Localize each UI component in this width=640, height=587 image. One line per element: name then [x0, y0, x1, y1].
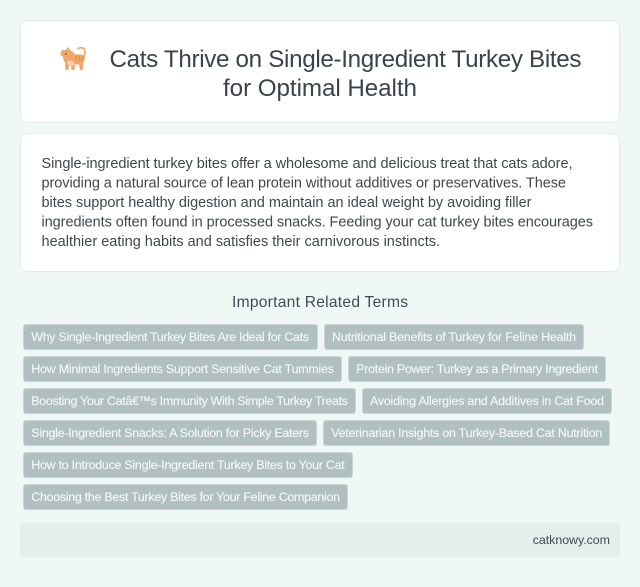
title text: Cats Thrive on Single-Ingredient Turkey Bites — [110, 46, 582, 73]
description text — [42, 156, 593, 250]
tag: choosing the best: Choosing the Best Turkey Bites for Your Feline Companion — [31, 490, 340, 504]
tag: ideal for cats — [24, 324, 318, 350]
tag: immunity — [24, 388, 356, 414]
tag: sensitive tummies — [24, 356, 342, 382]
heading: related terms: Important Related Terms — [232, 294, 408, 311]
tag: picky eaters: Single-Ingredient Snacks: A Solution for Picky Eaters — [31, 426, 309, 440]
tag: protein power — [348, 356, 606, 382]
tag: protein power: Protein Power: Turkey as a Primary Ingredient — [356, 362, 599, 376]
description text: bites support healthy digestion and maintain an ideal weight by avoiding filler — [42, 195, 532, 211]
related terms tags — [24, 324, 612, 510]
tag: nutritional benefits: Nutritional Benefits of Turkey for Feline Health — [332, 330, 576, 344]
tag: allergies: Avoiding Allergies and Additives in Cat Food — [370, 394, 604, 408]
tag: how to introduce: How to Introduce Single-Ingredient Turkey Bites to Your Cat — [31, 458, 345, 472]
description text: ingredients often found in processed snacks. Feeding your cat turkey bites encourages — [42, 214, 593, 230]
tag: allergies — [362, 388, 612, 414]
tag: choosing the best — [24, 484, 348, 510]
title text: for Optimal Health — [223, 75, 417, 102]
tag: veterinarian insights: Veterinarian Insights on Turkey-Based Cat Nutrition — [331, 426, 602, 440]
footer: catknowy.com — [533, 533, 610, 547]
icon: cat — [60, 47, 85, 70]
tag: how to introduce — [24, 452, 352, 478]
footer — [20, 523, 620, 557]
title text — [110, 46, 582, 102]
tag: sensitive tummies: How Minimal Ingredients Support Sensitive Cat Tummies — [31, 362, 334, 376]
tag: nutritional benefits — [324, 324, 584, 350]
title card — [20, 20, 620, 122]
tag: picky eaters — [24, 420, 316, 446]
description text: healthier eating habits and satisfies their carnivorous instincts. — [42, 234, 440, 250]
tag: ideal for cats: Why Single-Ingredient Turkey Bites Are Ideal for Cats — [31, 330, 309, 344]
description text: Single-ingredient turkey bites offer a wholesome and delicious treat that cats adore, — [42, 156, 572, 172]
tag: veterinarian insights — [324, 420, 610, 446]
description text: providing a natural source of lean protein without additives or preservatives. These — [42, 176, 566, 192]
panel: description — [20, 134, 620, 272]
tag: immunity: Boosting Your Catâ€™s Immunity With Simple Turkey Treats — [31, 394, 348, 408]
